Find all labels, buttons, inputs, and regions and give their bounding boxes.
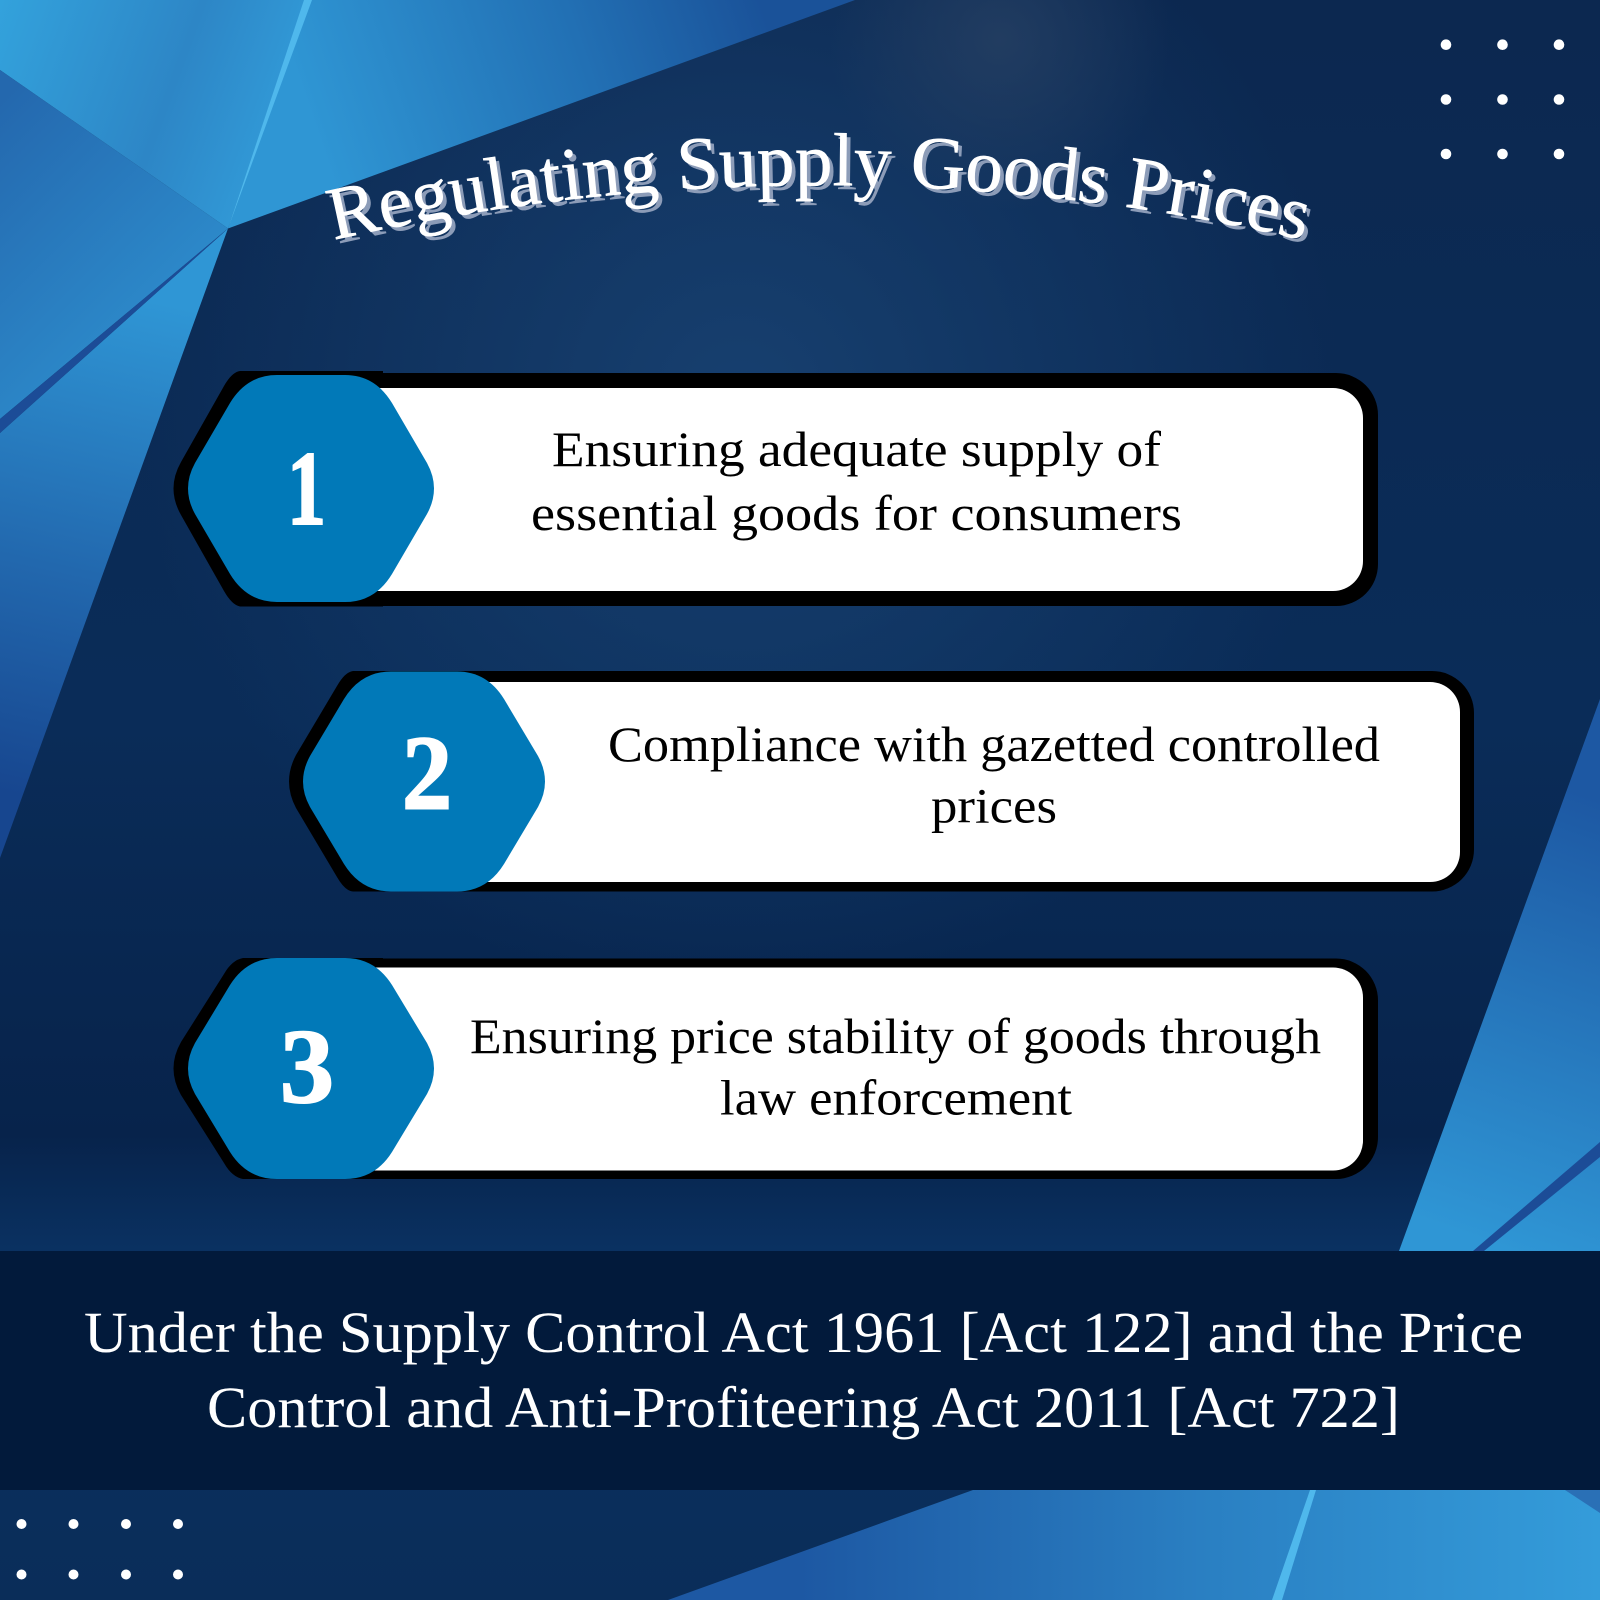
card 2 text: Compliance with gazetted controlled (608, 716, 1380, 772)
footer text: Under the Supply Control Act 1961 [Act 122] and the Price (84, 1300, 1523, 1365)
card 3 text: law enforcement (720, 1070, 1072, 1126)
card 3 number: 3 (280, 1008, 334, 1125)
card 3 text: Ensuring price stability of goods through (470, 1008, 1321, 1064)
card 2 number: 2 (402, 714, 452, 832)
decorative dots: bottom left (16, 1519, 183, 1580)
card 3 (174, 958, 1378, 1179)
card 2 (289, 671, 1474, 892)
decorative dots: top right (1441, 39, 1564, 159)
footer panel (0, 1251, 1600, 1490)
card 2 number badge (303, 672, 545, 892)
card 1 number badge (188, 375, 434, 602)
card 3 number badge (188, 958, 434, 1179)
card 1 text: Ensuring adequate supply of (552, 421, 1161, 477)
title on arc: Regulating Supply Goods Prices (329, 137, 1310, 244)
footer text: Control and Anti-Profiteering Act 2011 [Act 722] (207, 1375, 1400, 1440)
card 1 (174, 371, 1378, 606)
title on arc: Regulating Supply Goods Prices (325, 132, 1307, 240)
card 1 number: 1 (287, 430, 326, 547)
card 1 text: essential goods for consumers (531, 485, 1182, 541)
card 2 text: prices (931, 778, 1057, 834)
